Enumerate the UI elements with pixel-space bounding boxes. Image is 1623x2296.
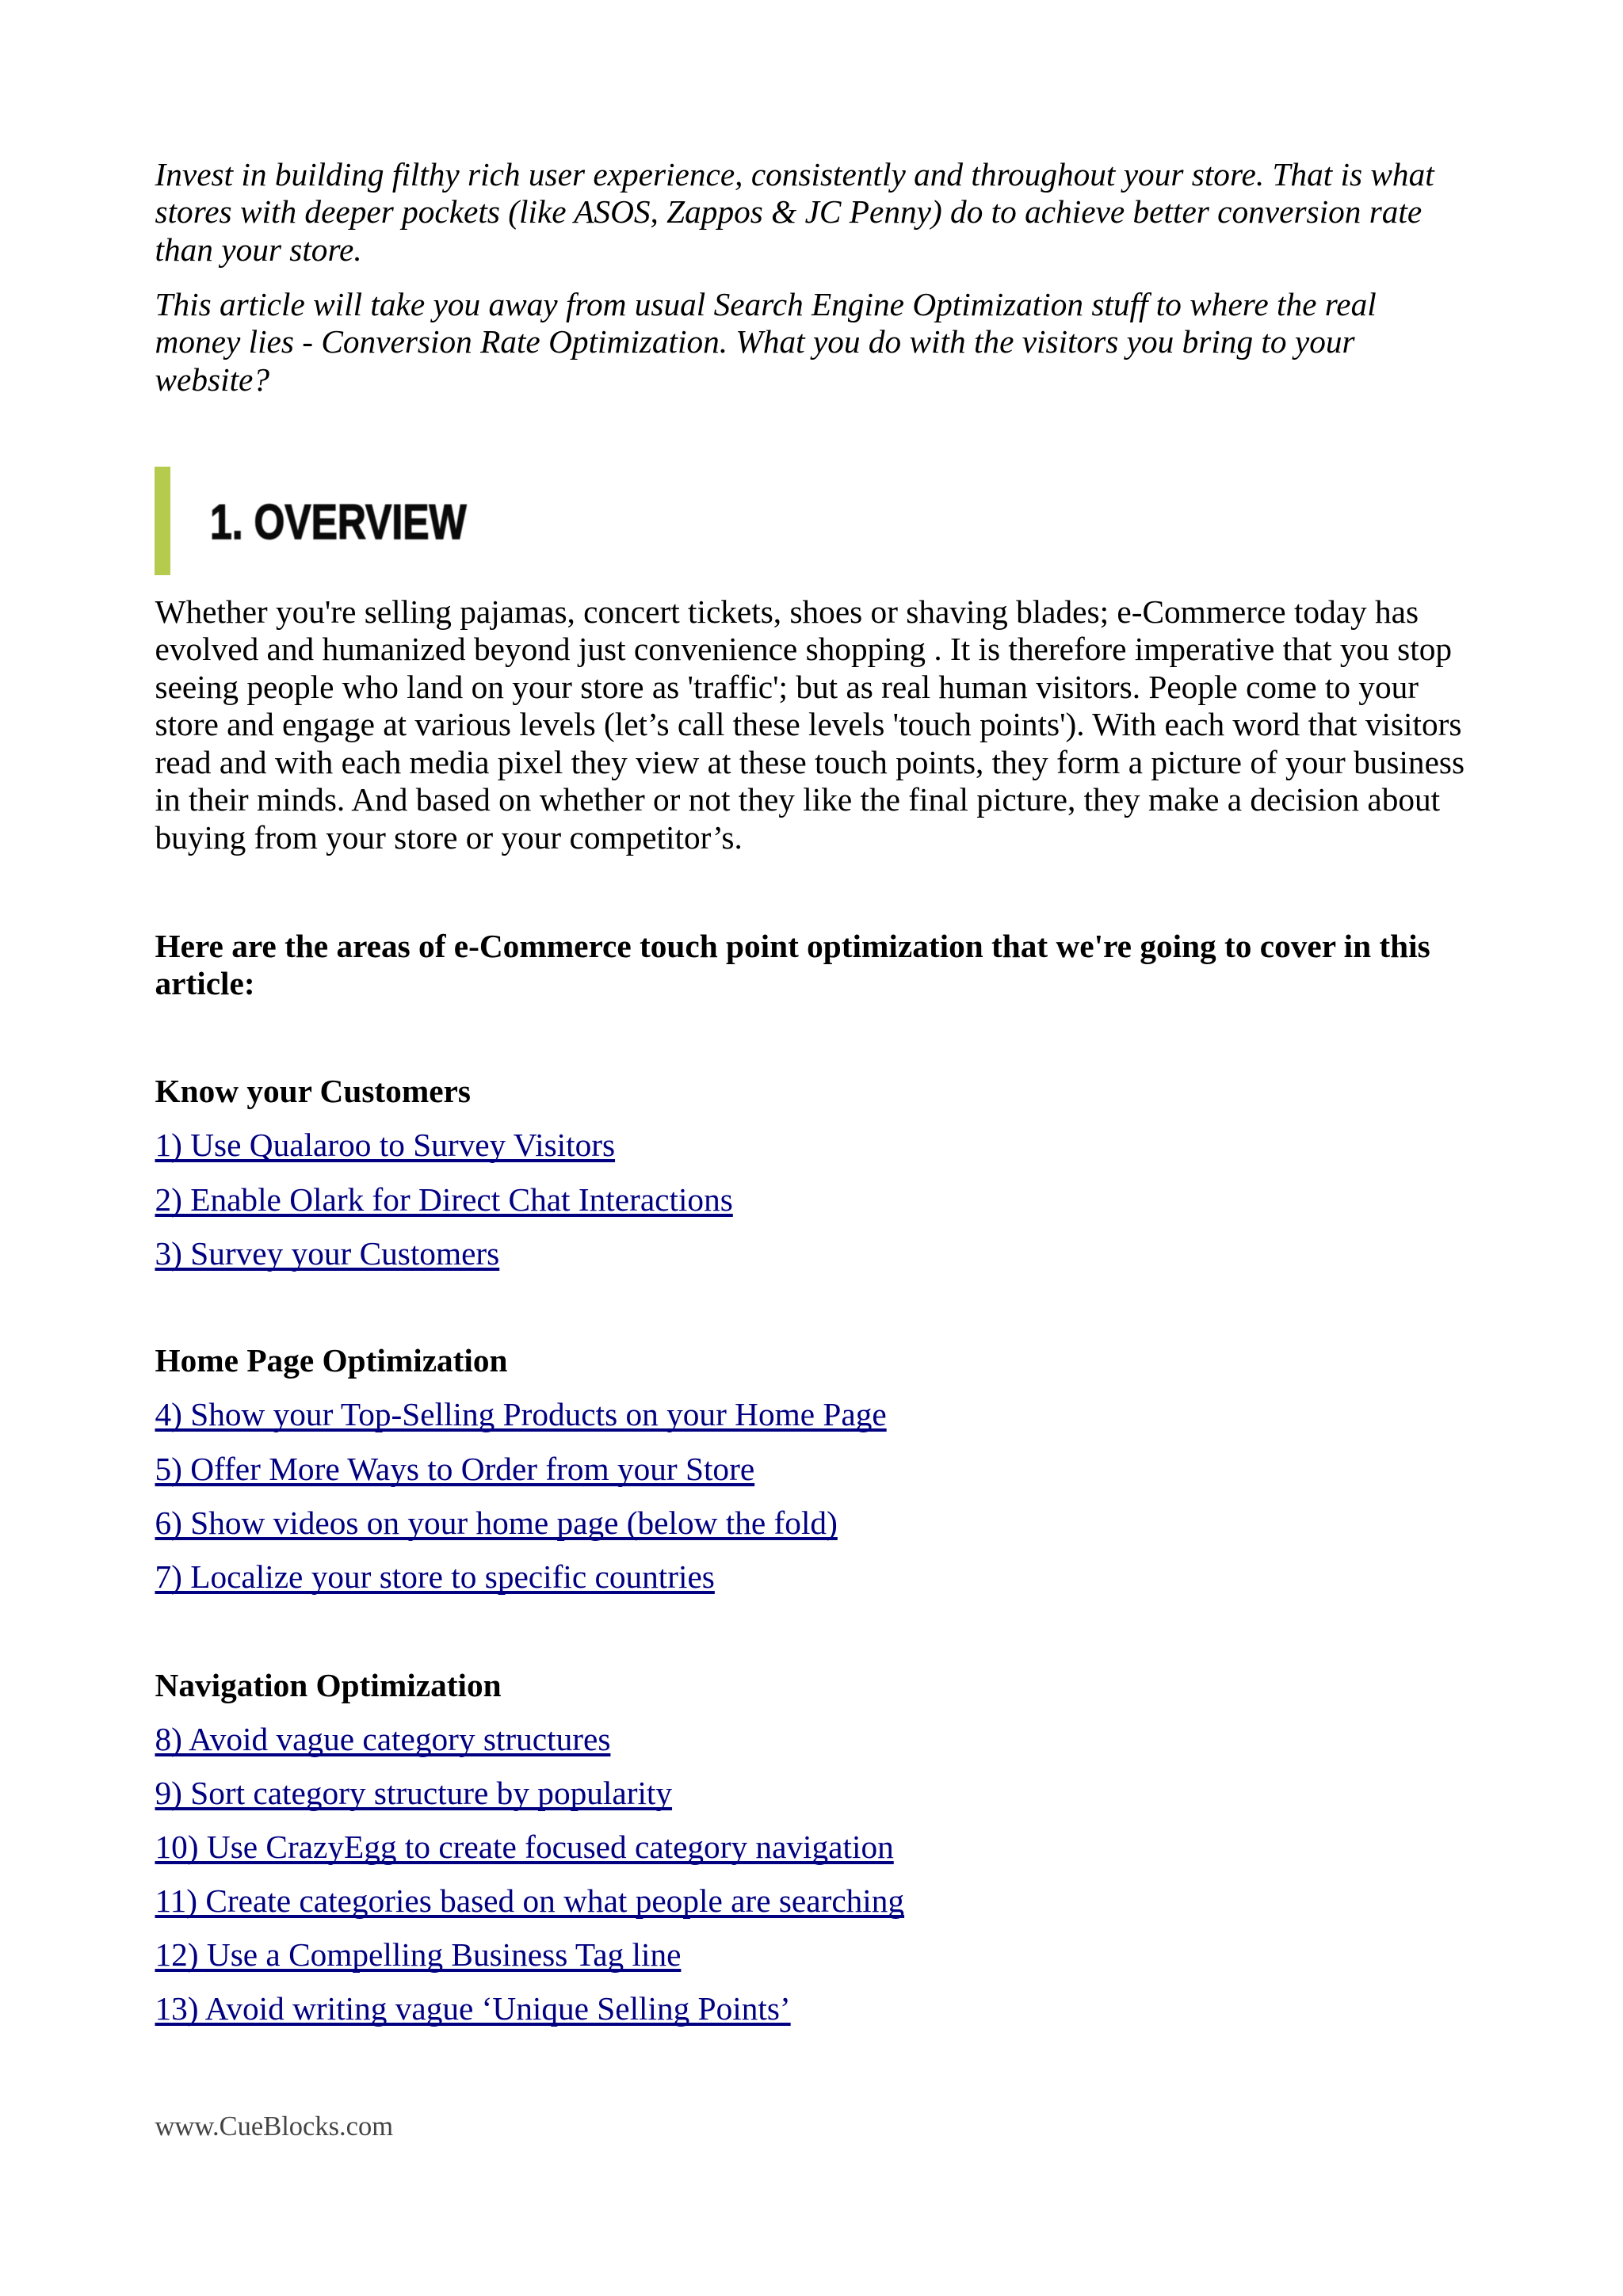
link 2: 2) Enable Olark for Direct Chat Interactions (155, 1181, 733, 1218)
section: Home Page Optimization (155, 1342, 887, 1595)
link 6: 6) Show videos on your home page (below the fold) (155, 1505, 838, 1541)
heading: 1. Overview: 1. OVERVIEW (210, 495, 467, 550)
link 5: 5) Offer More Ways to Order from your Store (155, 1451, 754, 1487)
bold intro to contents list: article: (155, 965, 255, 1001)
intro paragraph 1: Invest in building filthy rich user experience, consistently and throughout your store. That is what (155, 155, 1434, 192)
section heading: Navigation Optimization (155, 1667, 502, 1703)
intro paragraph 1: than your store. (155, 231, 362, 268)
bold intro to contents list (155, 927, 1430, 1001)
intro paragraph 2: money lies - Conversion Rate Optimization. What you do with the visitors you bring to your (155, 323, 1355, 360)
intro paragraph 2: This article will take you away from usual Search Engine Optimization stuff to where the real (155, 285, 1377, 322)
intro paragraph 1 (155, 155, 1434, 268)
overview body text (155, 593, 1465, 856)
link 10: 10) Use CrazyEgg to create focused category navigation (155, 1829, 894, 1865)
link 7: 7) Localize your store to specific countries (155, 1558, 715, 1595)
footer website: www.CueBlocks.com (155, 2111, 393, 2142)
section: Navigation Optimization (155, 1667, 905, 2027)
overview body text: store and engage at various levels (let’s call these levels 'touch points'). With each word that visitors (155, 706, 1461, 742)
bold intro to contents list: Here are the areas of e-Commerce touch point optimization that we're going to cover in this (155, 927, 1430, 963)
overview body text: in their minds. And based on whether or not they like the final picture, they make a decision about (155, 781, 1440, 818)
link 12: 12) Use a Compelling Business Tag line (155, 1936, 681, 1973)
section heading: Know your Customers (155, 1073, 471, 1109)
link 3: 3) Survey your Customers (155, 1235, 499, 1272)
link 9: 9) Sort category structure by popularity (155, 1775, 672, 1811)
overview body text: evolved and humanized beyond just convenience shopping . It is therefore imperative that you stop (155, 631, 1452, 667)
link 8: 8) Avoid vague category structures (155, 1721, 610, 1757)
overview body text: read and with each media pixel they view at these touch points, they form a picture of your business (155, 744, 1465, 780)
link 1: 1) Use Qualaroo to Survey Visitors (155, 1127, 615, 1163)
intro paragraph 2 (155, 285, 1377, 398)
overview body text: seeing people who land on your store as 'traffic'; but as real human visitors. People come to your (155, 669, 1419, 705)
section: Know your Customers (155, 1073, 733, 1272)
link 13: 13) Avoid writing vague ‘Unique Selling Points’ (155, 1990, 791, 2027)
intro paragraph 1: stores with deeper pockets (like ASOS, Zappos & JC Penny) do to achieve better conversion rate (155, 193, 1422, 230)
overview body text: Whether you're selling pajamas, concert tickets, shoes or shaving blades; e-Commerce today has (155, 593, 1419, 629)
intro paragraph 2: website? (155, 361, 269, 398)
link 11: 11) Create categories based on what people are searching (155, 1882, 904, 1919)
heading accent bar (155, 467, 170, 575)
overview body text: buying from your store or your competitor’s. (155, 819, 743, 856)
section heading: Home Page Optimization (155, 1342, 508, 1379)
link 4: 4) Show your Top-Selling Products on your Home Page (155, 1396, 887, 1432)
